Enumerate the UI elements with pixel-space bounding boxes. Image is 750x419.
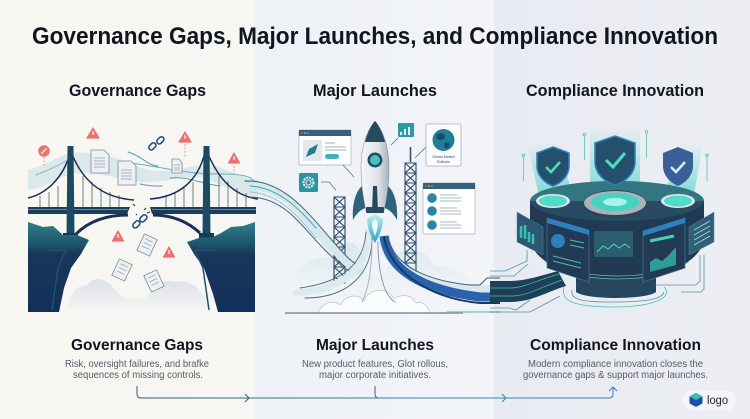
teal data stream into rocket base — [250, 181, 360, 272]
rocket porthole — [368, 152, 382, 168]
platform body — [530, 200, 704, 280]
card: info list — [423, 183, 475, 234]
bridge hangers — [40, 175, 246, 207]
caption: governance gaps — [65, 337, 209, 381]
title: Governance Gaps, Major Launches, and Compliance Innovation — [32, 23, 718, 50]
caption: compliance innovation: governance gaps & support major launches. — [523, 370, 708, 381]
lattice towers — [334, 147, 416, 283]
rocket flame — [367, 214, 383, 243]
platform top — [530, 181, 704, 221]
icon: documents — [91, 150, 182, 292]
card: global market rollouts: Global Market — [432, 155, 455, 159]
clouds below bridge — [66, 279, 212, 312]
heading: compliance innovation: Compliance Innovation — [526, 82, 704, 100]
shields — [537, 136, 693, 186]
caption: major launches: New product features, Glot rollous, — [302, 359, 448, 370]
card: global market rollouts: Rollouts — [437, 160, 450, 164]
dashboard screens — [517, 212, 714, 282]
blue data stream to platform — [384, 236, 500, 303]
caption: governance gaps: sequences of missing controls. — [73, 370, 203, 381]
illustration: rocket launch — [250, 121, 500, 313]
platform emitters — [536, 194, 570, 208]
card: product feature — [299, 130, 351, 165]
icon: bar chart tile — [398, 123, 414, 137]
arrow: connector flow — [137, 386, 617, 402]
data band into platform — [490, 271, 566, 302]
rocket nose — [365, 121, 385, 142]
rocket exhaust plume — [296, 232, 395, 302]
cliffs — [28, 222, 89, 312]
illustration: compliance platform — [490, 127, 714, 312]
caption: major launches: Major Launches — [316, 337, 434, 354]
icon: chain links — [132, 136, 165, 229]
circuit pins — [522, 131, 708, 181]
rocket centre fin and nozzle — [372, 186, 378, 212]
platform pedestal — [576, 272, 656, 298]
under-deck arches — [76, 215, 128, 234]
illustration: broken bridge — [28, 128, 258, 312]
caption: compliance innovation — [523, 337, 708, 381]
icon: warning triangles — [87, 128, 240, 257]
caption: governance gaps: Risk, oversight failures, and brafke — [65, 359, 209, 370]
data stream across bridge — [28, 152, 258, 197]
bridge deck — [28, 207, 256, 214]
caption: compliance innovation: Compliance Innovation — [530, 337, 701, 354]
heading: governance gaps: Governance Gaps — [69, 82, 206, 100]
rocket fins — [353, 186, 397, 220]
bridge towers — [66, 146, 74, 236]
bridge cables — [28, 152, 258, 200]
caption: compliance innovation: Modern compliance innovation closes the — [528, 359, 703, 370]
launch clouds — [290, 243, 476, 290]
heading: major launches: Major Launches — [313, 82, 437, 100]
broken fragments — [133, 204, 150, 215]
logo badge — [682, 390, 737, 411]
circuit traces — [490, 250, 704, 312]
rocket body — [361, 121, 389, 211]
caption: major launches: major corporate initiatives. — [319, 370, 431, 381]
light beams — [527, 143, 573, 200]
card: global market rollouts — [426, 124, 461, 166]
caption: major launches — [302, 337, 448, 381]
icon: broken link badge — [38, 145, 50, 157]
logo badge: logo — [707, 395, 728, 407]
caption: governance gaps: Governance Gaps — [71, 337, 203, 354]
icon: gear tile — [299, 173, 318, 192]
